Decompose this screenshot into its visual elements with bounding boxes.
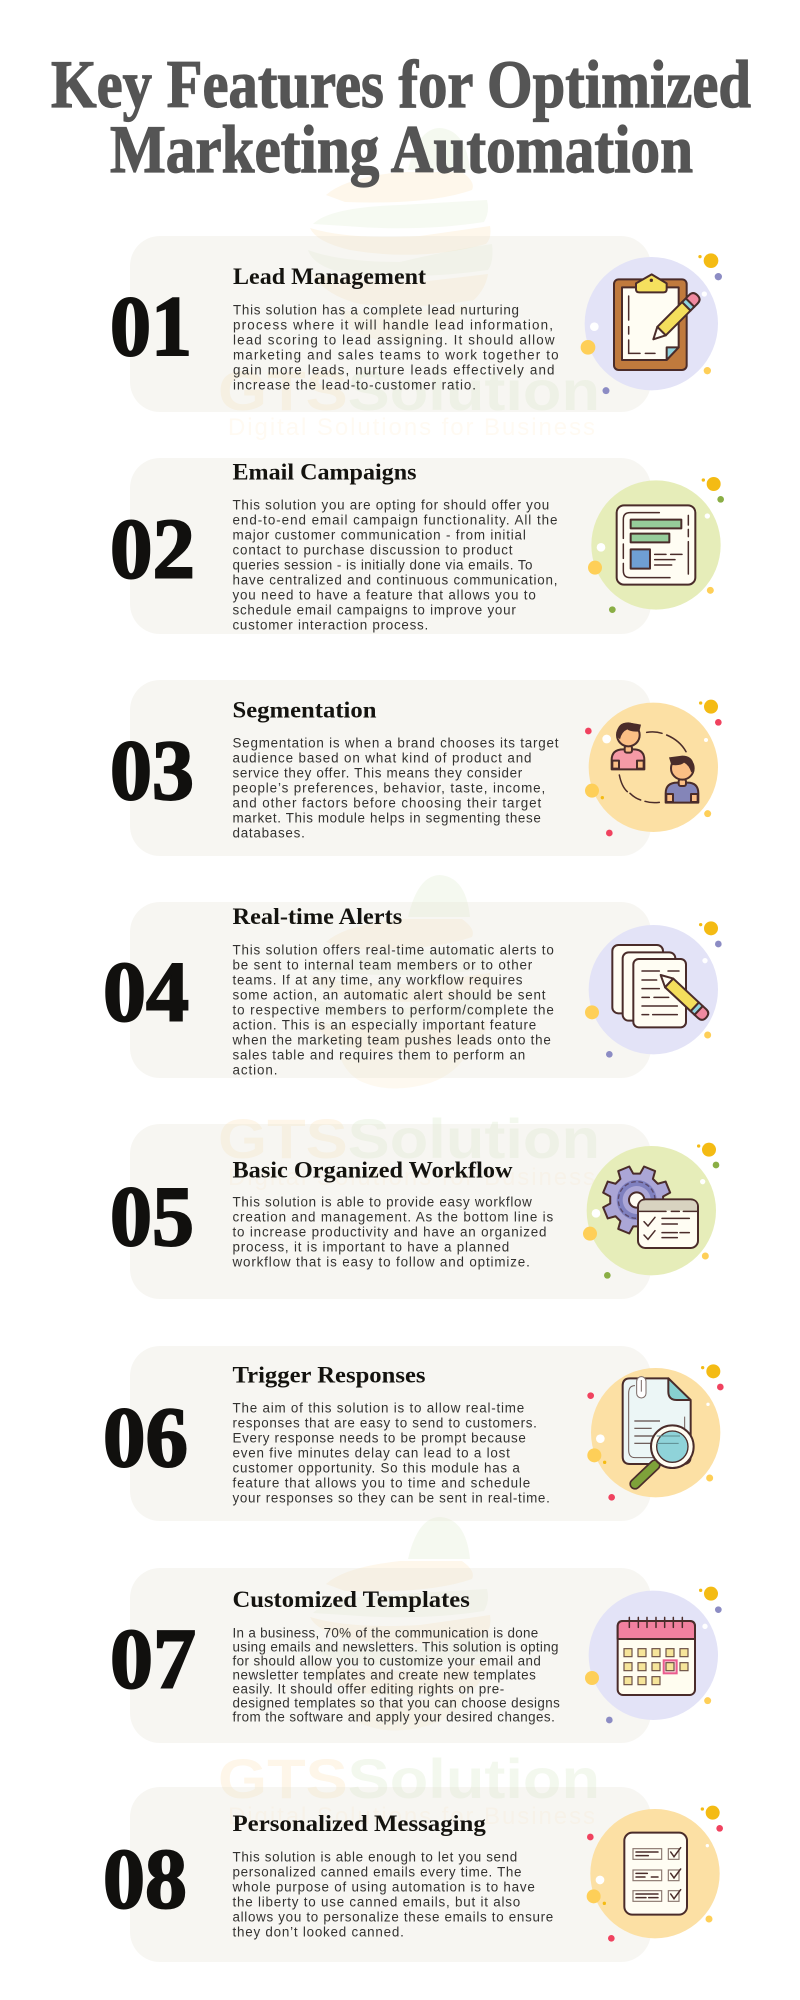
text block: whole purpose of using automation is to have xyxy=(232,1880,535,1895)
text block xyxy=(232,497,558,632)
text block: to increase productivity and have an organized xyxy=(232,1225,546,1240)
heading: Basic Organized Workflow xyxy=(232,1158,513,1183)
icon: calendar xyxy=(585,1587,722,1723)
text block: and other factors before choosing their target xyxy=(232,796,541,811)
text block: they don’t looked canned. xyxy=(232,1925,404,1940)
text block: the liberty to use canned emails, but it also xyxy=(232,1895,520,1910)
text block xyxy=(232,1850,553,1940)
text block: Every response needs to be prompt because xyxy=(232,1431,526,1446)
watermark: middle logo: GTS Solution xyxy=(218,1107,600,1170)
text block: customer interaction process. xyxy=(232,617,428,632)
number 07: 07 xyxy=(110,1611,196,1707)
text block: be sent to internal team members or to other xyxy=(232,957,533,972)
watermark: top logo: GTS Solution xyxy=(218,359,600,422)
title: Marketing Automation xyxy=(110,111,693,187)
number 08: 08 xyxy=(103,1831,187,1927)
text block: market. This module helps in segmenting these xyxy=(232,811,541,826)
number 06: 06 xyxy=(103,1389,188,1485)
text block: action. This is an especially important feature xyxy=(232,1017,536,1032)
text block xyxy=(232,1401,550,1506)
watermark: top logo: Digital Solutions for Business xyxy=(228,414,595,441)
number 01: 01 xyxy=(110,278,192,374)
watermark: lower logo xyxy=(218,1517,600,1830)
icon: clipboard xyxy=(581,253,722,394)
text block: your responses so they can be sent in real-time. xyxy=(232,1491,550,1506)
panel: trigger responses xyxy=(103,1346,724,1521)
text block: to respective members to perform/complete the xyxy=(232,1002,554,1017)
text block: lead scoring to lead assigning. It should allow xyxy=(233,332,555,347)
text block: This solution is able enough to let you send xyxy=(232,1850,517,1865)
text block: responses that are easy to send to customers. xyxy=(232,1416,537,1431)
icon: gear and checklist xyxy=(583,1143,719,1279)
text block xyxy=(233,302,559,392)
text block: This solution offers real-time automatic alerts to xyxy=(232,942,554,957)
panel: segmentation xyxy=(110,680,722,856)
text block: end-to-end email campaign functionality. All the xyxy=(232,512,558,527)
number 05: 05 xyxy=(110,1168,194,1264)
watermark: lower logo: Digital Solutions for Business xyxy=(228,1803,595,1830)
icon: checklist xyxy=(587,1806,723,1942)
text block: databases. xyxy=(232,826,305,841)
text block: schedule email campaigns to improve your xyxy=(232,602,516,617)
text block: gain more leads, nurture leads effectively and xyxy=(233,362,554,377)
text block: This solution is able to provide easy workflow xyxy=(232,1195,532,1210)
text block: audience based on what kind of product and xyxy=(232,751,532,766)
panel: basic organized workflow xyxy=(110,1124,719,1299)
icon: document and magnifier xyxy=(587,1364,724,1501)
heading: Trigger Responses xyxy=(232,1363,426,1388)
text block: This solution you are opting for should offer you xyxy=(232,497,549,512)
text block: feature that allows you to time and schedule xyxy=(232,1476,530,1491)
text block: marketing and sales teams to work together to xyxy=(233,347,559,362)
text block: even five minutes delay can lead to a lost xyxy=(232,1446,510,1461)
text block: In a business, 70% of the communication is done xyxy=(232,1626,538,1641)
panel: lead management xyxy=(110,236,722,412)
text block: This solution has a complete lead nurturing xyxy=(233,302,519,317)
text block: creation and management. As the bottom line is xyxy=(232,1210,553,1225)
text block: The aim of this solution is to allow real-time xyxy=(232,1401,524,1416)
text block: process where it will handle lead information, xyxy=(233,317,553,332)
title xyxy=(51,46,751,187)
text block xyxy=(232,1195,553,1270)
text block: process, it is important to have a planned xyxy=(232,1240,509,1255)
text block: increase the lead-to-customer ratio. xyxy=(233,377,476,392)
icon: two people xyxy=(585,700,722,836)
text block: action. xyxy=(232,1062,278,1077)
panel: real-time alerts xyxy=(103,902,722,1078)
panel: customized templates xyxy=(110,1568,722,1743)
text block: from the software and apply your desired changes. xyxy=(232,1710,555,1725)
text block: have centralized and continuous communication, xyxy=(232,572,558,587)
watermark: lower logo: GTS Solution xyxy=(218,1747,600,1810)
text block xyxy=(232,942,554,1077)
text block: contact to purchase discussion to product xyxy=(232,542,513,557)
text block: sales table and requires them to perform an xyxy=(232,1047,525,1062)
heading: Personalized Messaging xyxy=(232,1811,486,1836)
text block: major customer communication - from initial xyxy=(232,527,526,542)
text block: teams. If at any time, any workflow requires xyxy=(232,972,523,987)
text block xyxy=(232,736,559,841)
text block: people’s preferences, behavior, taste, income, xyxy=(232,781,545,796)
heading: Segmentation xyxy=(232,697,377,722)
text block: newsletter templates and create new templates xyxy=(232,1668,536,1683)
text block: for should allow you to customize your email and xyxy=(232,1654,541,1669)
text block: customer opportunity. So this module has a xyxy=(232,1461,520,1476)
text block: personalized canned emails every time. The xyxy=(232,1865,522,1880)
number 02: 02 xyxy=(110,501,195,597)
watermark: top logo xyxy=(218,128,600,441)
text block: queries session - is initially done via emails. To xyxy=(232,557,532,572)
number 03: 03 xyxy=(110,722,194,818)
text block: workflow that is easy to follow and optimize. xyxy=(232,1255,530,1270)
text block: Segmentation is when a brand chooses its target xyxy=(232,736,559,751)
heading: Customized Templates xyxy=(232,1587,470,1612)
heading: Real-time Alerts xyxy=(232,904,402,929)
icon: documents and pencil xyxy=(585,921,722,1058)
text block: allows you to personalize these emails to ensure xyxy=(232,1910,553,1925)
icon: email layout xyxy=(588,477,724,613)
heading: Email Campaigns xyxy=(232,459,417,484)
text block: when the marketing team pushes leads onto the xyxy=(232,1032,551,1047)
watermark: middle logo: Digital Solutions for Business xyxy=(228,1164,595,1191)
text block: you need to have a feature that allows you to xyxy=(232,587,536,602)
text block: service they offer. This means they consider xyxy=(232,766,523,781)
text block: designed templates so that you can choose designs xyxy=(232,1696,560,1711)
text block xyxy=(232,1626,560,1725)
watermark: middle logo xyxy=(218,875,600,1191)
text block: easily. It should offer editing rights on pre- xyxy=(232,1682,504,1697)
heading: Lead Management xyxy=(233,264,426,289)
text block: using emails and newsletters. This solution is opting xyxy=(232,1640,558,1655)
panel: email campaigns xyxy=(110,458,724,634)
number 04: 04 xyxy=(103,944,189,1040)
text block: some action, an automatic alert should be sent xyxy=(232,987,546,1002)
panel: personalized messaging xyxy=(103,1787,723,1962)
